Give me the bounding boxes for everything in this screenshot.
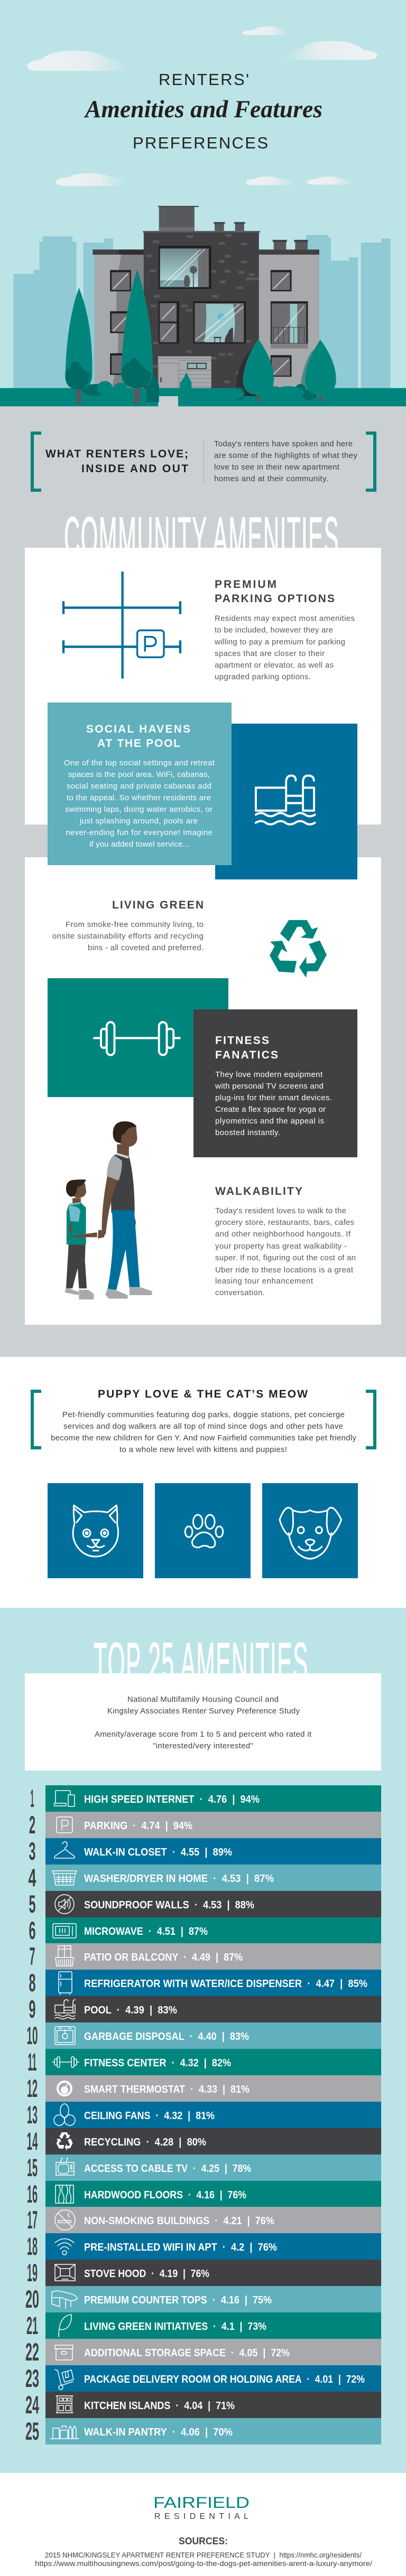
row 7: patio or balcony: PATIO OR BALCONY · 4.49 | 87% [84, 1952, 243, 1963]
panel: social havens at the pool: just splashing around, pools are [79, 817, 198, 826]
top window [159, 246, 211, 289]
row 6: microwave [29, 1916, 381, 1944]
icon: parking lot [63, 572, 180, 679]
sources: 2015 NHMC/KINGSLEY APARTMENT RENTER PREFERENCE STUDY | https://nmhc.org/residents/ [45, 2551, 362, 2559]
row 21: living green initiatives: 21 [26, 2311, 38, 2339]
row 1: high speed internet [31, 1784, 381, 1812]
text block: premium parking options: PREMIUM [215, 578, 276, 591]
panel: social havens at the pool: One of the top social settings and retreat [64, 758, 215, 767]
icon: counter island [52, 2291, 77, 2308]
row 3: walk-in closet: WALK-IN CLOSET · 4.55 | 89% [84, 1847, 232, 1858]
icon: no smoking [55, 2210, 75, 2230]
panel: community amenities white cards [25, 548, 381, 1325]
row 7: patio or balcony: 7 [30, 1942, 35, 1970]
panel: fitness fanatics: FITNESS [215, 1034, 269, 1047]
row 4: washer/dryer in home [29, 1863, 381, 1891]
panel: social havens at the pool: swimming laps, doing water aerobics, or [65, 805, 213, 814]
text block: living green: LIVING GREEN [112, 899, 204, 911]
icon: hand truck [55, 2369, 73, 2390]
row 11: fitness center: 11 [27, 2048, 37, 2076]
intro callout: what renters love: are some of the highlights of what they [214, 451, 357, 460]
row 21: living green initiatives: LIVING GREEN INITIATIVES · 4.1 | 73% [84, 2321, 266, 2333]
row 20: premium counter tops: PREMIUM COUNTER TOPS · 4.16 | 75% [84, 2294, 272, 2306]
row 1: high speed internet: HIGH SPEED INTERNET · 4.76 | 94% [84, 1794, 260, 1805]
row 6: microwave: 6 [29, 1916, 36, 1944]
row 19: stove hood: STOVE HOOD · 4.19 | 76% [84, 2268, 209, 2280]
row 19: stove hood [27, 2259, 381, 2287]
building [93, 206, 319, 396]
panel: survey description: Amenity/average score from 1 to 5 and percent who rated it [95, 1730, 312, 1739]
panel: fitness fanatics: Create a flex space for yoga or [215, 1105, 326, 1114]
row 24: kitchen islands [25, 2391, 381, 2419]
row 12: smart thermostat: SMART THERMOSTAT · 4.33 | 81% [84, 2084, 250, 2095]
panel: social havens at the pool: SOCIAL HAVENS [86, 723, 190, 735]
sources: SOURCES: [179, 2536, 228, 2546]
row 15: access to cable tv: 15 [27, 2153, 38, 2181]
row 14: recycling: RECYCLING · 4.28 | 80% [84, 2137, 206, 2148]
row 22: additional storage space: ADDITIONAL STORAGE SPACE · 4.05 | 72% [84, 2347, 290, 2359]
row 23: package delivery room: PACKAGE DELIVERY ROOM OR HOLDING AREA · 4.01 | 72% [84, 2374, 365, 2385]
trees and shrubs [65, 269, 336, 404]
row 2: parking: PARKING · 4.74 | 94% [84, 1820, 192, 1832]
panel: survey description: National Multifamily Housing Council and [127, 1695, 279, 1704]
icon: thermostat [57, 2081, 72, 2096]
row 1: high speed internet: 1 [31, 1784, 34, 1812]
row 25: walk-in pantry: 25 [25, 2417, 39, 2445]
icon tile: cat [48, 1483, 143, 1578]
row 2: parking: 2 [29, 1811, 35, 1839]
text block: walkability: WALKABILITY [215, 1185, 302, 1197]
icon: pantry shelf [50, 2426, 79, 2439]
icon: laundry basket [52, 1871, 77, 1885]
row 24: kitchen islands: 24 [25, 2391, 39, 2419]
icon: stove hood [55, 2264, 75, 2281]
icon: recycling [55, 2132, 74, 2151]
entrance [158, 356, 211, 396]
title [84, 70, 322, 152]
icon: barbell [52, 2057, 79, 2067]
panel: fitness fanatics: plug-ins for their smart devices. [215, 1093, 332, 1102]
row 16: hardwood floors: 16 [27, 2180, 38, 2208]
callout: puppy love and the cat's meow: services and dog walkers are all top of mind since dogs and other pets have [63, 1422, 343, 1431]
text block: walkability: your property has great walkability - [215, 1242, 347, 1251]
panel: fitness fanatics: boosted instantly. [215, 1128, 280, 1137]
row 14: recycling [26, 2127, 381, 2155]
panel: social havens at the pool [48, 702, 232, 865]
panel: fitness fanatics [193, 1009, 357, 1157]
panel: social havens at the pool: social seating and private cabanas add [67, 782, 211, 791]
city skyline [13, 235, 391, 388]
row 20: premium counter tops [25, 2285, 381, 2313]
row 9: pool: 9 [29, 1995, 36, 2023]
icon: pool [55, 2000, 75, 2019]
panel: fitness fanatics: They love modern equipment [215, 1070, 323, 1079]
text block: walkability: and other neighborhood hangouts. If [215, 1230, 351, 1239]
row 8: refrigerator [29, 1969, 381, 1997]
text block: living green: onsite sustainability efforts and recycling [52, 932, 204, 941]
row 13: ceiling fans: 13 [27, 2101, 38, 2129]
icon tile: paw [155, 1483, 251, 1578]
callout: puppy love and the cat's meow: become the new children for Gen Y. And now Fairfield communities take pet friendly [51, 1434, 356, 1442]
man [102, 1121, 152, 1299]
panel: fitness fanatics: FANATICS [215, 1049, 278, 1061]
text block: premium parking options: spaces that are closer to their [215, 649, 325, 658]
row 17: non-smoking buildings: NON-SMOKING BUILDINGS · 4.21 | 76% [84, 2215, 274, 2227]
lawn and sidewalk [0, 388, 406, 423]
panel: pool icon background [215, 724, 357, 879]
icon: microwave [53, 1924, 76, 1938]
panel: survey description [25, 1673, 381, 1771]
title: RENTERS' [159, 70, 249, 89]
row 15: access to cable tv: ACCESS TO CABLE TV · 4.25 | 78% [84, 2163, 251, 2175]
row 20: premium counter tops: 20 [25, 2285, 39, 2313]
icon: sink disposal [55, 2027, 75, 2045]
row 25: walk-in pantry [25, 2417, 381, 2445]
text block: premium parking options [214, 578, 355, 681]
row 12: smart thermostat: 12 [27, 2074, 38, 2102]
text block: premium parking options: to be included, however they are [215, 625, 333, 635]
icon: kitchen cabinet [56, 2396, 73, 2413]
icon: leaf [59, 2315, 71, 2337]
row 9: pool: POOL · 4.39 | 83% [84, 2004, 177, 2016]
row 3: walk-in closet: 3 [29, 1837, 36, 1865]
row 11: fitness center [27, 2048, 381, 2076]
row 16: hardwood floors [27, 2180, 381, 2208]
row 24: kitchen islands: KITCHEN ISLANDS · 4.04 | 71% [84, 2400, 235, 2412]
row 23: package delivery room: 23 [25, 2364, 39, 2392]
panel: fitness icon background [48, 978, 228, 1097]
panel: social havens at the pool: spaces is the pool area. WiFi, cabanas, [68, 770, 210, 779]
row 19: stove hood: 19 [27, 2259, 38, 2287]
icon: swimming pool [256, 775, 315, 825]
title: PREFERENCES [133, 134, 268, 152]
row 10: garbage disposal: GARBAGE DISPOSAL · 4.40 | 83% [84, 2031, 249, 2043]
title: Amenities and Features [84, 96, 322, 123]
row 10: garbage disposal: 10 [26, 2021, 38, 2049]
logo: fairfield residential: FAIRFIELD [153, 2494, 250, 2512]
icon: parking sign [57, 1817, 72, 1833]
bricks [146, 234, 259, 383]
panel: social havens at the pool: if you added towel service... [89, 840, 189, 849]
text block: walkability: super. If not, figuring out the cost of an [215, 1253, 356, 1262]
text block: premium parking options: willing to pay a premium for parking [214, 638, 345, 647]
intro callout: what renters love: love to see in their new apartment [214, 463, 340, 472]
text block: premium parking options: upgraded parking options. [215, 672, 311, 681]
icon: muted speaker [55, 1895, 74, 1914]
text block: walkability [215, 1185, 356, 1297]
callout: puppy love and the cat's meow [32, 1388, 375, 1454]
row 7: patio or balcony [30, 1942, 381, 1970]
callout: puppy love and the cat's meow: Pet-friendly communities featuring dog parks, doggie stations, pet concierge [62, 1410, 345, 1419]
row 4: washer/dryer in home: WASHER/DRYER IN HOME · 4.53 | 87% [84, 1873, 274, 1885]
row 18: pre-installed wifi: 18 [27, 2232, 38, 2260]
row 3: walk-in closet [29, 1837, 381, 1865]
logo: fairfield residential: RESIDENTIAL [154, 2512, 248, 2521]
text block: living green: bins - all coveted and preferred. [88, 943, 204, 952]
row 21: living green initiatives [26, 2311, 381, 2339]
text block: walkability: grocery store, restaurants, bars, cafes [215, 1218, 354, 1227]
callout: puppy love and the cat's meow: to a whole new level with kittens and puppies! [119, 1445, 287, 1454]
text block: premium parking options: apartment or elevator, as well as [215, 661, 334, 670]
icon: refrigerator [59, 1972, 72, 1994]
row 17: non-smoking buildings [27, 2206, 381, 2234]
middle left window [159, 301, 179, 344]
row 5: soundproof walls [29, 1890, 381, 1918]
left wing windows [110, 270, 131, 292]
intro callout: what renters love [32, 433, 375, 490]
panel: fitness fanatics: with personal TV screens and [215, 1082, 324, 1091]
panel: social havens at the pool: never-ending fun for everyone! Imagine [66, 828, 213, 837]
panel: survey description: "interested/very interested" [153, 1741, 253, 1750]
panel: social havens at the pool: AT THE POOL [97, 737, 180, 750]
row 13: ceiling fans: CEILING FANS · 4.32 | 81% [84, 2110, 215, 2122]
row 4: washer/dryer in home: 4 [29, 1863, 36, 1891]
row 2: parking [29, 1811, 381, 1839]
row 8: refrigerator: 8 [29, 1969, 36, 1997]
sources: https://www.multihousingnews.com/post/going-to-the-dogs-pet-amenities-arent-a-luxury-anymore/ [35, 2559, 372, 2568]
row 6: microwave: MICROWAVE · 4.51 | 87% [84, 1926, 208, 1937]
icon: television [56, 2158, 74, 2175]
row 14: recycling: 14 [26, 2127, 38, 2155]
text block: walkability: leasing tour enhancement [215, 1277, 313, 1286]
text block: living green: From smoke-free community living, to [66, 920, 204, 929]
text block: premium parking options: Residents may expect most amenities [215, 614, 355, 623]
row 12: smart thermostat [27, 2074, 381, 2102]
row 16: hardwood floors: HARDWOOD FLOORS · 4.16 | 76% [84, 2189, 246, 2201]
child [64, 1179, 106, 1299]
row 8: refrigerator: REFRIGERATOR WITH WATER/ICE DISPENSER · 4.47 | 85% [84, 1978, 367, 1990]
illustration: father and child walking [64, 1121, 152, 1299]
row 22: additional storage space: 22 [25, 2338, 39, 2366]
row 18: pre-installed wifi: PRE-INSTALLED WIFI IN APT · 4.2 | 76% [84, 2242, 277, 2253]
row 10: garbage disposal [26, 2021, 381, 2049]
text block: walkability: Uber ride to these locations is a great [215, 1266, 354, 1275]
icon: barbell [93, 1022, 180, 1055]
row 5: soundproof walls: SOUNDPROOF WALLS · 4.53 | 88% [84, 1899, 254, 1911]
text block: living green [52, 899, 204, 952]
intro callout: what renters love: homes and at their community. [214, 474, 328, 483]
right wing windows [271, 270, 292, 292]
callout: puppy love and the cat's meow: PUPPY LOVE & THE CAT’S MEOW [98, 1388, 308, 1400]
middle wide window [193, 301, 246, 344]
row 18: pre-installed wifi [27, 2232, 381, 2260]
row 11: fitness center: FITNESS CENTER · 4.32 | 82% [84, 2057, 231, 2069]
text block: walkability: conversation. [215, 1288, 265, 1297]
icon: coat hanger [54, 1842, 75, 1858]
text block: walkability: Today's resident loves to walk to the [215, 1206, 346, 1215]
row 13: ceiling fans [27, 2101, 381, 2129]
intro callout: what renters love: INSIDE AND OUT [81, 463, 188, 475]
row 22: additional storage space [25, 2338, 381, 2366]
icon tile: dog [262, 1483, 358, 1578]
row 25: walk-in pantry: WALK-IN PANTRY · 4.06 | 70% [84, 2427, 233, 2438]
icon: storage box [55, 2345, 73, 2360]
icon: recycling arrows [264, 920, 331, 981]
icon: wifi [55, 2238, 74, 2255]
row 15: access to cable tv [27, 2153, 381, 2181]
icon: balcony [56, 1946, 73, 1966]
intro callout: what renters love: WHAT RENTERS LOVE; [45, 448, 188, 460]
sources [35, 2536, 372, 2568]
panel: survey description: Kingsley Associates Renter Survey Preference Study [107, 1707, 300, 1716]
panel: fitness fanatics: plyometrics and the appeal is [215, 1117, 324, 1126]
row 17: non-smoking buildings: 17 [27, 2206, 38, 2234]
icon: ceiling fan [54, 2104, 75, 2125]
icon: laptop and phone [54, 1791, 75, 1806]
panel: social havens at the pool: to the appeal. So whether residents are [67, 793, 211, 802]
icon: wood planks [56, 2185, 73, 2203]
row 5: soundproof walls: 5 [29, 1890, 36, 1918]
text block: premium parking options: PARKING OPTIONS [215, 593, 335, 605]
hero illustration: clouds, skyline, building and trees [0, 26, 406, 423]
intro callout: what renters love: Today's renters have spoken and here [214, 439, 353, 448]
clouds [27, 26, 377, 186]
row 23: package delivery room [25, 2364, 381, 2392]
row 9: pool [29, 1995, 381, 2023]
logo: fairfield residential [153, 2494, 250, 2521]
